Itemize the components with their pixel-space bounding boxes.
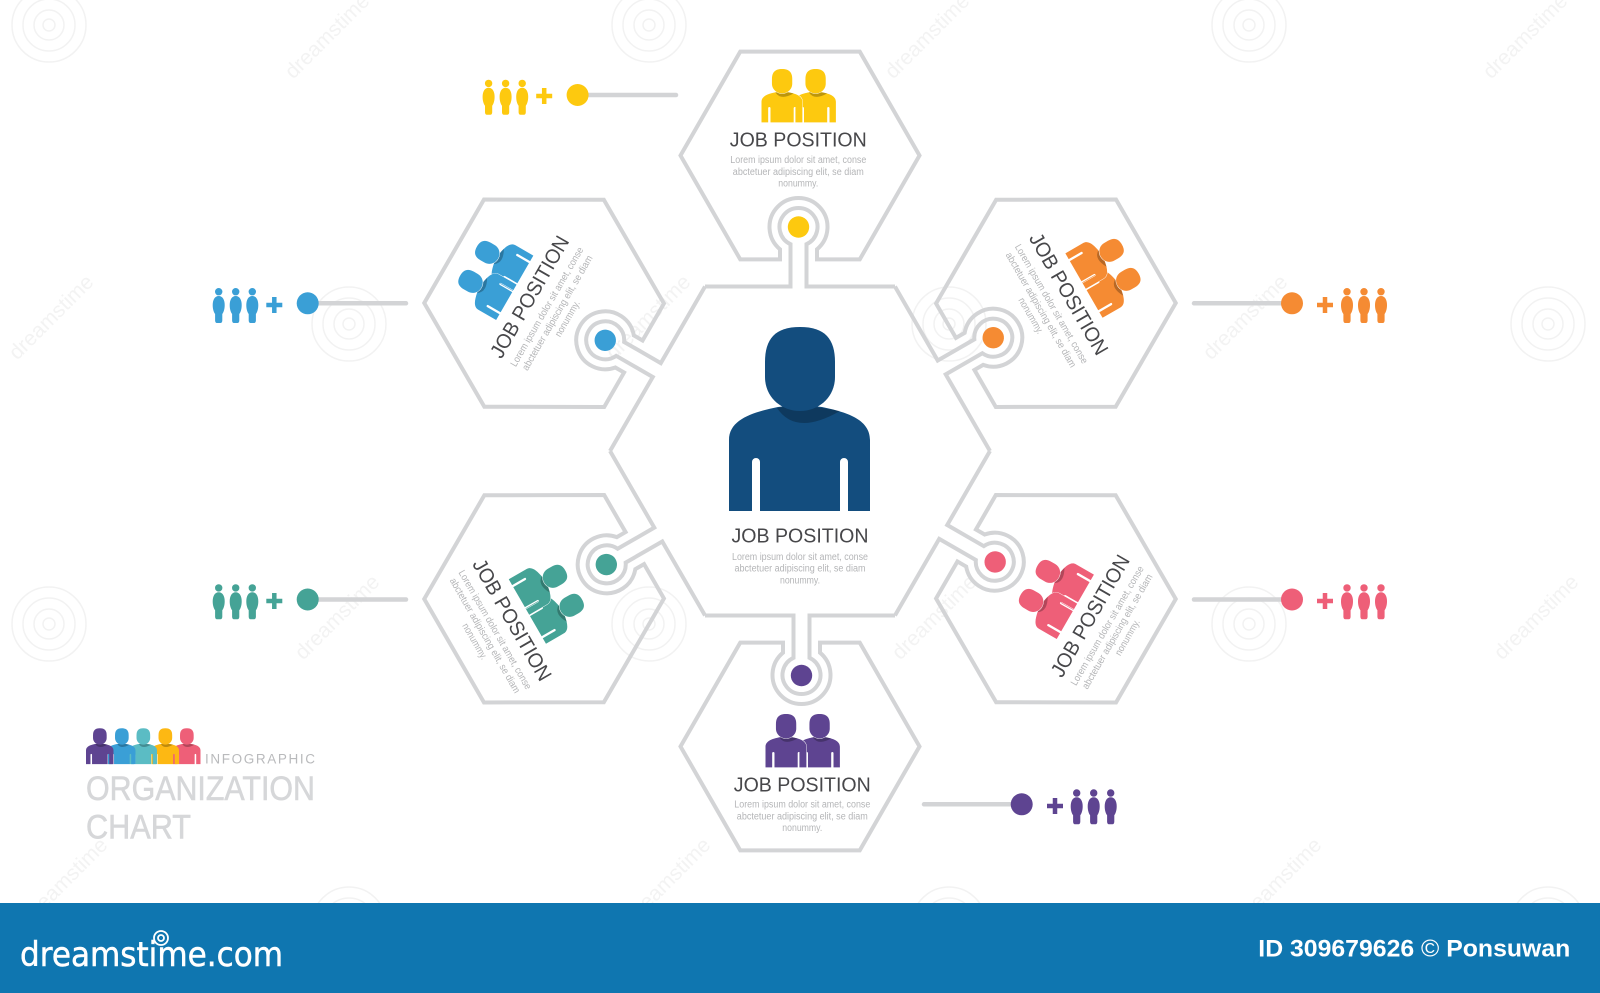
panel: lower right pink position <box>906 443 1206 754</box>
center description <box>732 552 868 586</box>
brand name: dreamstime.com <box>20 935 283 975</box>
hexagon frame <box>394 443 694 754</box>
center description: nonummy. <box>780 575 820 586</box>
description: abctetuer adipiscing elit, se diam <box>1003 251 1078 370</box>
description: nonummy. <box>778 179 818 190</box>
panel: bottom purple position <box>680 643 920 850</box>
watermark pattern: dreamstime <box>18 833 112 927</box>
hexagon frame <box>394 148 694 459</box>
icon: two people <box>450 229 533 320</box>
center description: Lorem ipsum dolor sit amet, conse <box>732 552 868 563</box>
description: Lorem ipsum dolor sit amet, conse <box>1012 243 1090 366</box>
description: nonummy. <box>782 823 822 834</box>
description: abctetuer adipiscing elit, se diam <box>733 167 864 178</box>
watermark pattern: dreamstime <box>887 570 981 664</box>
infographic label: INFOGRAPHIC <box>205 751 315 766</box>
description: nonummy. <box>1016 296 1045 336</box>
description: nonummy. <box>1113 618 1143 658</box>
hexagon frame <box>906 443 1206 754</box>
node dot <box>981 547 1010 577</box>
heading: JOB POSITION <box>486 232 574 362</box>
description: nonummy. <box>459 622 489 662</box>
hexagon frame <box>906 148 1206 459</box>
description <box>730 155 867 190</box>
hexagon frame <box>680 52 920 259</box>
panel: upper left blue position <box>394 148 694 459</box>
description: abctetuer adipiscing elit, se diam <box>447 576 522 695</box>
icon: row of five people <box>86 728 200 764</box>
watermark pattern: dreamstime <box>1198 270 1292 364</box>
center heading: JOB POSITION <box>732 525 868 548</box>
panel: center position <box>729 327 870 586</box>
callout: yellow team connector <box>483 80 676 115</box>
heading: JOB POSITION <box>734 774 871 797</box>
node dot <box>592 550 621 579</box>
icon: two people <box>509 553 592 644</box>
callout: teal team connector <box>213 584 406 619</box>
description: abctetuer adipiscing elit, se diam <box>1080 572 1155 691</box>
callout: orange team connector <box>1194 288 1387 323</box>
watermark pattern: dreamstime <box>4 270 98 364</box>
title line one: ORGANIZATION <box>86 770 315 808</box>
icon: center person <box>729 327 870 511</box>
description: nonummy. <box>553 299 583 339</box>
panel: top yellow position <box>680 52 920 259</box>
title line two: CHART <box>86 808 191 846</box>
panel: upper right orange position <box>906 148 1206 459</box>
watermark pattern: dreamstime <box>290 570 384 664</box>
heading: JOB POSITION <box>730 129 867 152</box>
center description: abctetuer adipiscing elit, se diam <box>734 564 866 575</box>
icon: two people <box>1011 548 1094 639</box>
description: Lorem ipsum dolor sit amet, conse <box>734 800 871 811</box>
node dot <box>979 323 1008 352</box>
description: abctetuer adipiscing elit, se diam <box>737 811 868 822</box>
callout: purple team connector <box>924 789 1117 824</box>
hexagon frame <box>680 643 920 850</box>
callout: blue team connector <box>213 288 406 323</box>
description: Lorem ipsum dolor sit amet, conse <box>1069 564 1147 688</box>
image id and credit: ID 309679626 © Ponsuwan <box>1258 936 1570 963</box>
heading: JOB POSITION <box>1024 229 1113 359</box>
center hexagon frame with connectors <box>542 208 1058 694</box>
panel: lower left teal position <box>394 443 694 754</box>
watermark pattern: dreamstime <box>601 270 695 364</box>
icon: two people <box>766 714 840 767</box>
callout: pink team connector <box>1194 584 1387 619</box>
description: abctetuer adipiscing elit, se diam <box>520 254 595 373</box>
heading: JOB POSITION <box>468 555 556 685</box>
icon: two people <box>1065 227 1149 318</box>
icon: two people <box>762 69 836 122</box>
watermark pattern: dreamstime <box>1489 570 1583 664</box>
watermark pattern: dreamstime <box>1232 833 1326 927</box>
heading: JOB POSITION <box>1046 551 1135 681</box>
node dot <box>591 326 620 355</box>
description <box>734 800 871 834</box>
title block: organization chart <box>86 728 315 846</box>
node dot <box>788 216 809 238</box>
footer banner <box>0 903 1600 993</box>
description: Lorem ipsum dolor sit amet, conse <box>456 568 533 692</box>
description: Lorem ipsum dolor sit amet, conse <box>509 245 587 369</box>
node dot <box>791 665 812 686</box>
description: Lorem ipsum dolor sit amet, conse <box>730 155 867 166</box>
watermark pattern: dreamstime <box>621 833 715 927</box>
icon: spiral logo <box>154 931 168 945</box>
